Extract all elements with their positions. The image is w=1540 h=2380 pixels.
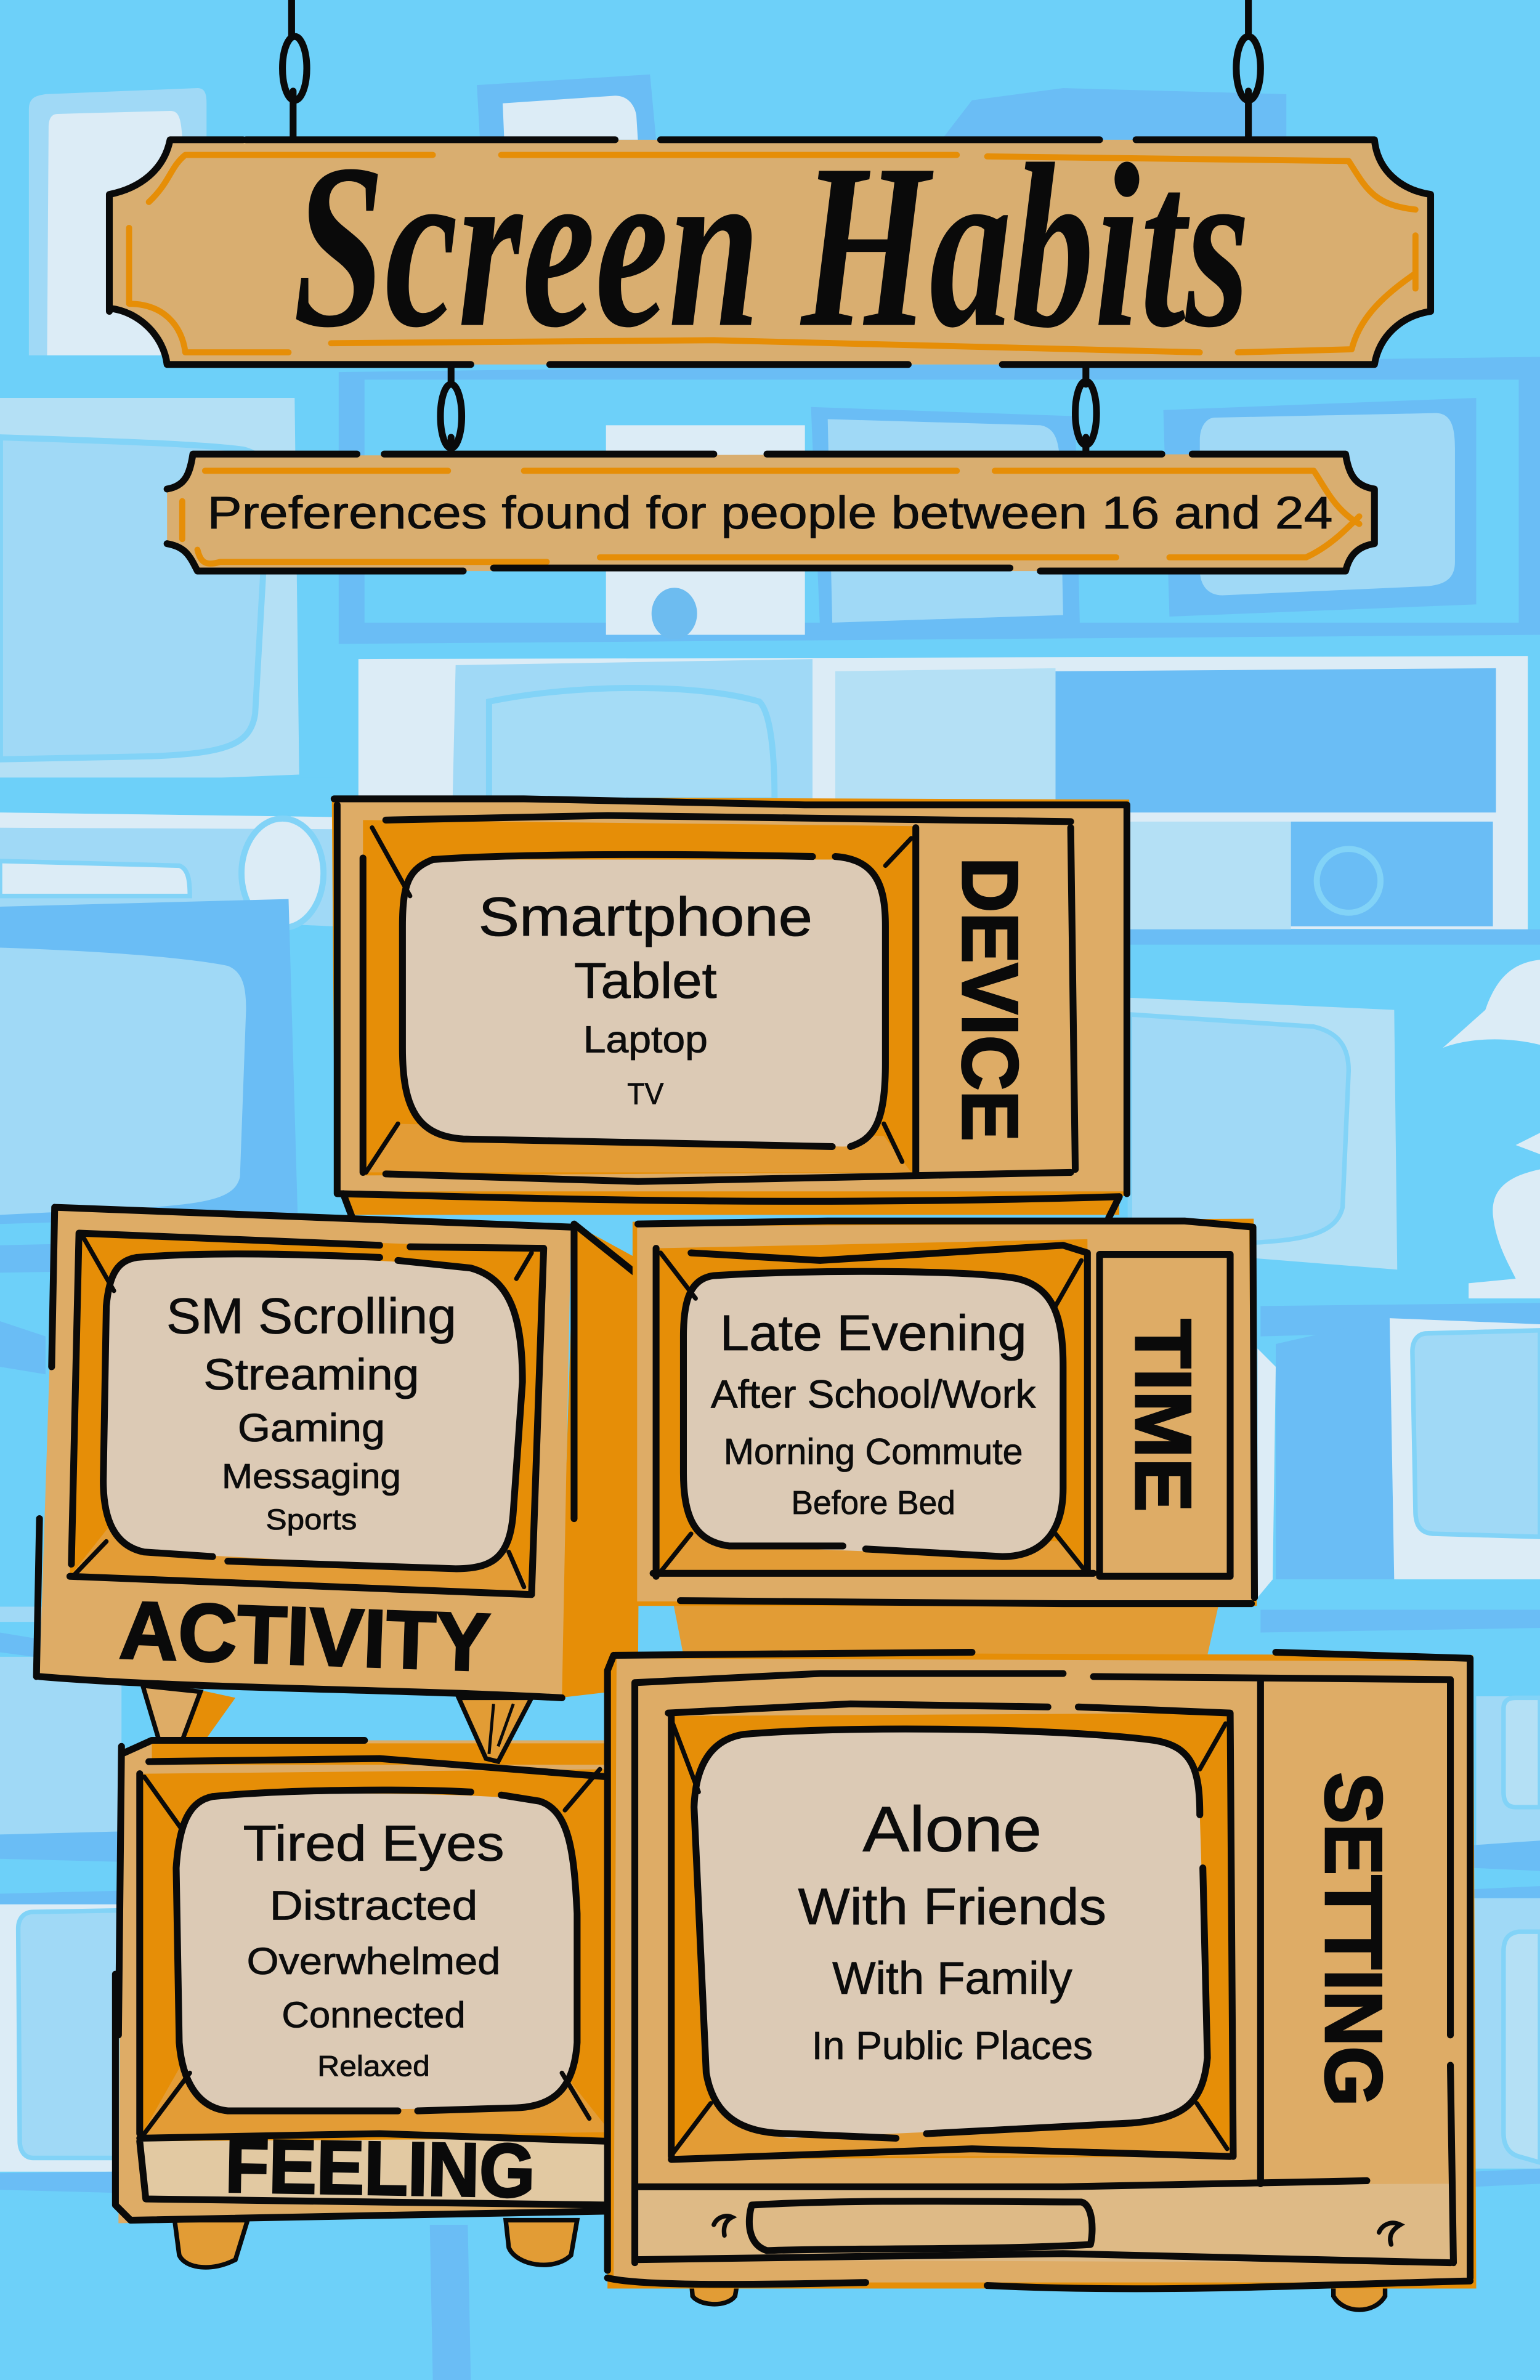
screen — [683, 1274, 1063, 1556]
feet — [175, 2220, 577, 2267]
time options: After School/Work — [711, 1372, 1036, 1417]
television: setting — [607, 1652, 1473, 2310]
hanging chains — [283, 0, 1260, 454]
device options: Tablet — [574, 953, 717, 1009]
feet — [691, 2278, 1385, 2310]
activity options: Streaming — [203, 1350, 419, 1399]
time options: Late Evening — [720, 1305, 1027, 1361]
device options: Laptop — [583, 1019, 708, 1061]
device options: Smartphone — [479, 886, 813, 947]
device options: TV — [627, 1077, 664, 1111]
feeling options: Connected — [282, 1994, 466, 2035]
activity options: Sports — [265, 1504, 357, 1536]
activity options — [166, 1289, 456, 1536]
left leg — [143, 1686, 235, 1742]
feeling options — [243, 1815, 505, 2082]
setting options: In Public Places — [812, 2023, 1093, 2068]
feeling options: Distracted — [270, 1883, 477, 1929]
chain: top left — [283, 0, 307, 140]
time options — [711, 1305, 1036, 1521]
television: time — [635, 1221, 1254, 1655]
setting options: Alone — [862, 1793, 1042, 1864]
activity label: ACTIVITY — [118, 1584, 492, 1689]
device options — [479, 886, 813, 1111]
title sign — [110, 115, 1430, 376]
activity options: Messaging — [222, 1457, 401, 1496]
activity options: SM Scrolling — [166, 1289, 456, 1345]
feeling options: Tired Eyes — [243, 1815, 505, 1871]
screen — [694, 1731, 1207, 2138]
screen — [402, 860, 885, 1146]
screen — [103, 1257, 522, 1569]
knobs — [714, 2216, 1400, 2244]
screen — [176, 1794, 577, 2111]
feeling options: Overwhelmed — [247, 1940, 500, 1983]
setting options: With Family — [832, 1953, 1072, 2004]
chain: top right — [1236, 0, 1260, 140]
television: activity — [36, 1207, 641, 1742]
setting options: With Friends — [798, 1877, 1106, 1935]
right leg of activity television, overlapping feeling — [459, 1698, 532, 1762]
setting label: SETTING — [1308, 1772, 1398, 2107]
feeling options: Relaxed — [317, 2050, 430, 2082]
television: feeling — [115, 1740, 610, 2267]
time label: TIME — [1119, 1319, 1207, 1512]
time options: Before Bed — [792, 1484, 955, 1521]
activity options: Gaming — [238, 1406, 385, 1450]
setting options — [798, 1793, 1106, 2068]
subtitle text: Preferences found for people between 16 and 24 — [208, 487, 1332, 538]
television: device — [334, 799, 1127, 1218]
time options: Morning Commute — [724, 1431, 1023, 1472]
feeling label: FEELING — [224, 2123, 536, 2214]
chain: lower left — [440, 365, 462, 454]
subtitle sign — [167, 454, 1374, 571]
chain: lower right — [1076, 365, 1096, 454]
device label: DEVICE — [946, 857, 1034, 1141]
control panel slot — [749, 2201, 1092, 2251]
